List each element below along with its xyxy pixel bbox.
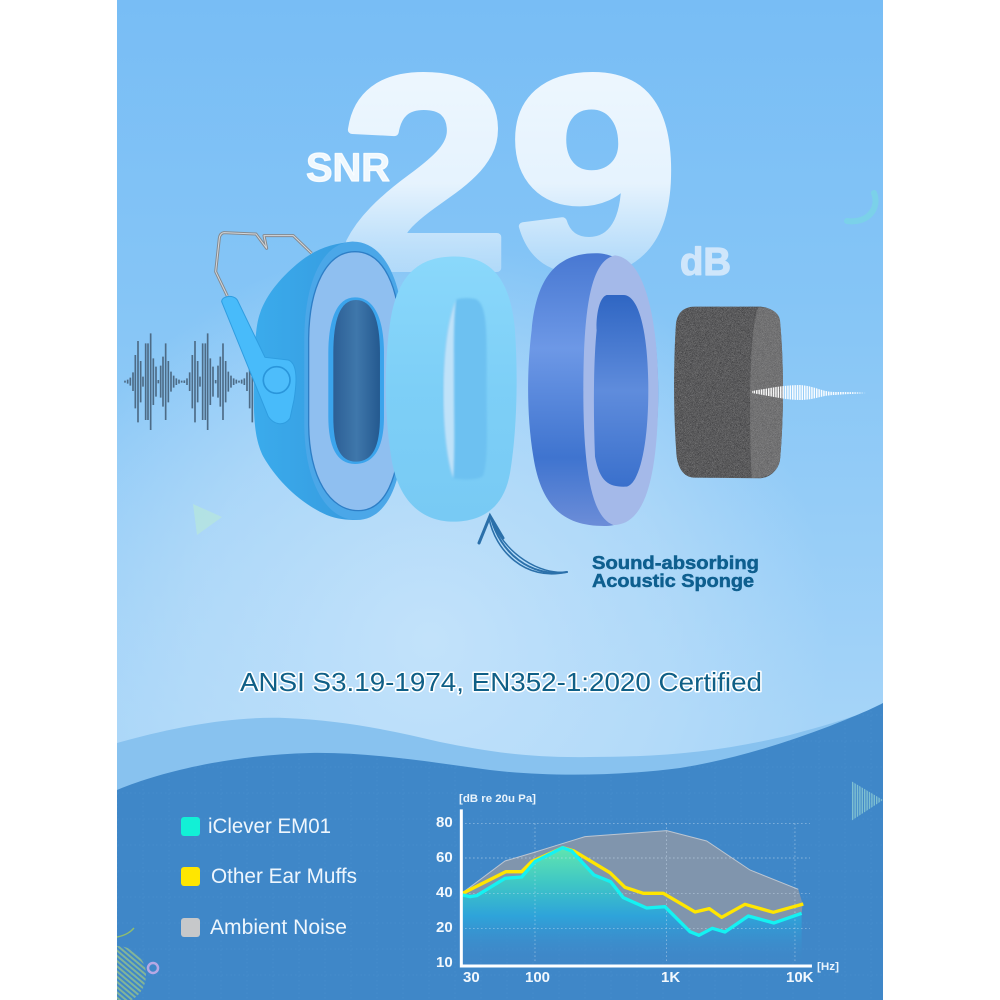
label dB: dB bbox=[680, 241, 731, 284]
axes bbox=[461, 809, 812, 966]
cup face bbox=[309, 252, 400, 511]
x axis labels: 1K bbox=[661, 969, 680, 986]
line chart bbox=[436, 793, 839, 986]
blue ear cushion bbox=[528, 253, 658, 526]
callout: sound-absorbing acoustic sponge: Acoustic Sponge bbox=[592, 570, 754, 591]
legend bbox=[181, 815, 357, 939]
callout: sound-absorbing acoustic sponge: Sound-absorbing bbox=[592, 552, 759, 573]
sound wave input bbox=[125, 333, 252, 430]
y axis labels: 60 bbox=[436, 849, 453, 866]
callout: sound-absorbing acoustic sponge bbox=[592, 552, 759, 591]
decorative triangle left bbox=[193, 504, 222, 535]
ear cup assembly bbox=[216, 233, 403, 520]
iClever curve bbox=[463, 848, 802, 935]
dark lower panel bbox=[117, 703, 883, 1000]
label SNR: SNR bbox=[306, 146, 390, 190]
y axis labels: 10 bbox=[436, 954, 453, 971]
sound wave output bbox=[752, 385, 866, 400]
big number 29: 29 bbox=[340, 20, 678, 327]
hinge knob bbox=[263, 367, 290, 393]
y axis labels bbox=[436, 814, 453, 971]
other ear muffs curve bbox=[463, 848, 803, 917]
legend: iClever EM01: iClever EM01 bbox=[208, 815, 331, 838]
decorative triangle right bbox=[851, 781, 883, 821]
hinge arm bbox=[222, 296, 296, 424]
x axis labels: 30 bbox=[463, 969, 480, 986]
curved arrow bbox=[479, 516, 567, 574]
decorative arc top right bbox=[847, 193, 876, 221]
axis title: Hz: [Hz] bbox=[817, 961, 839, 973]
y axis labels: 40 bbox=[436, 884, 453, 901]
x axis labels: 10K bbox=[786, 969, 814, 986]
area under iClever curve bbox=[463, 848, 802, 963]
cup opening bbox=[328, 297, 384, 464]
light blue foam ring bbox=[386, 257, 517, 522]
x axis labels bbox=[463, 969, 814, 986]
grey acoustic sponge bbox=[674, 307, 783, 478]
cup rim bbox=[304, 242, 403, 520]
axis title: dB: [dB re 20u Pa] bbox=[459, 793, 536, 805]
y axis labels: 20 bbox=[436, 919, 453, 936]
cup body bbox=[254, 242, 357, 520]
legend: Other Ear Muffs: Other Ear Muffs bbox=[211, 865, 357, 888]
ambient noise area bbox=[463, 831, 803, 935]
metal wire bbox=[216, 233, 312, 296]
decorative circle and arc bottom left bbox=[117, 928, 160, 1000]
certification text: ANSI S3.19-1974, EN352-1:2020 Certified bbox=[240, 667, 762, 697]
x axis labels: 100 bbox=[525, 969, 550, 986]
background panel bbox=[117, 0, 883, 1000]
legend: Ambient Noise: Ambient Noise bbox=[210, 916, 347, 939]
y axis labels: 80 bbox=[436, 814, 453, 831]
light wave band bbox=[117, 703, 883, 800]
